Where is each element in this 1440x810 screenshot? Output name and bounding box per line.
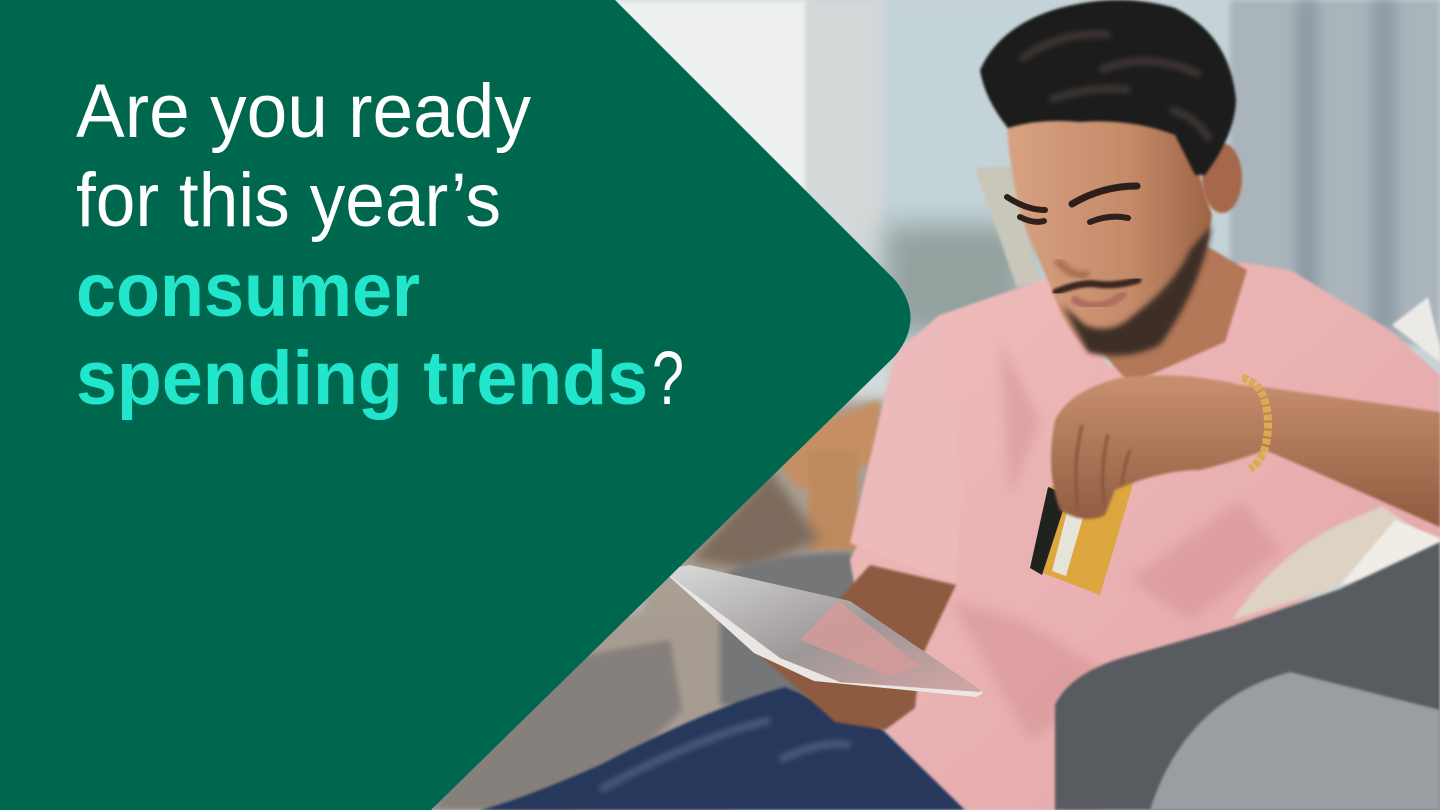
title line 3 highlighted: consumer bbox=[76, 248, 420, 333]
title line 4 highlighted with question mark: spending trends bbox=[76, 336, 648, 421]
title line 1: Are you ready bbox=[76, 69, 531, 154]
man: ear bbox=[1202, 143, 1242, 213]
credit card bbox=[1030, 467, 1138, 595]
title line 2: for this year’s bbox=[76, 158, 501, 243]
man: lower arm and hand holding tablet bbox=[745, 565, 956, 730]
man: hair bbox=[980, 0, 1236, 175]
cushions and sofa arm bbox=[1232, 506, 1422, 620]
tablet bbox=[662, 565, 982, 696]
man: jeans bbox=[480, 687, 965, 810]
man: beard bbox=[1062, 225, 1212, 356]
man: t-shirt bbox=[850, 262, 1440, 810]
man: neck bbox=[1100, 245, 1247, 384]
title line 4 highlighted with question mark: ? bbox=[652, 336, 684, 421]
bracelet bbox=[1242, 378, 1268, 469]
man: eyes, nose, mouth bbox=[1007, 186, 1138, 306]
panel: green arrow shape bbox=[0, 0, 910, 810]
man: forearm and hand holding card bbox=[1051, 375, 1440, 527]
man: face bbox=[1006, 112, 1212, 354]
title bbox=[76, 69, 684, 421]
